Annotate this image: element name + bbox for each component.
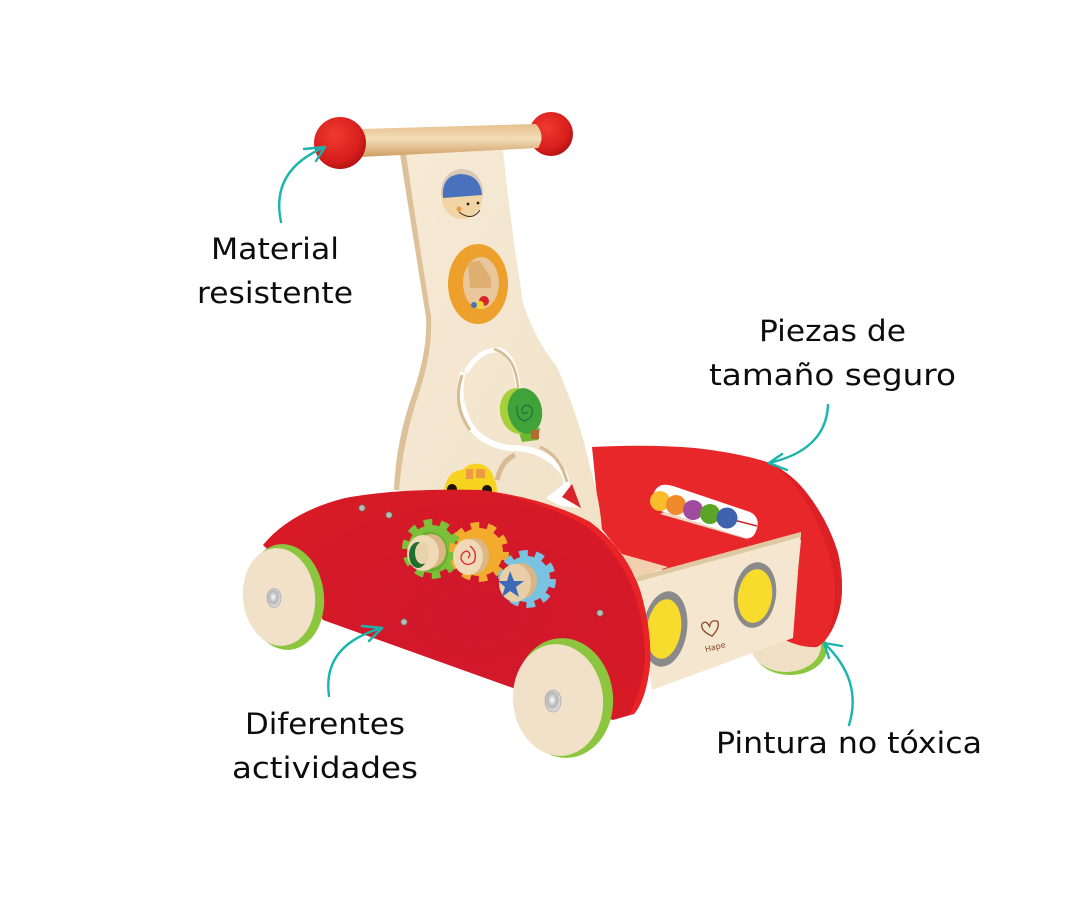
bead wire — [660, 501, 757, 526]
walker toy illustration — [238, 112, 842, 763]
label: piezas de tamaño seguro: tamaño seguro — [709, 358, 956, 392]
label: diferentes actividades — [232, 707, 418, 785]
orange ring window — [448, 244, 508, 324]
left red knob — [314, 117, 366, 169]
bead track loop — [458, 349, 568, 490]
plank yellow circles — [646, 562, 776, 667]
brand logo — [699, 619, 727, 654]
front red side panel — [263, 490, 650, 720]
front plank — [636, 532, 801, 690]
arrow: diferentes actividades — [328, 626, 382, 696]
green spiral piece — [496, 385, 546, 442]
cart floor — [622, 554, 668, 578]
front left wheel — [238, 540, 329, 654]
toy car — [444, 464, 497, 495]
screws — [359, 505, 603, 625]
label: diferentes actividades: Diferentes — [245, 707, 405, 741]
beads — [650, 491, 738, 528]
rear red side panel — [592, 446, 842, 647]
label: piezas de tamaño seguro — [709, 314, 956, 392]
label: material resistente: Material — [211, 232, 339, 266]
arrow: pintura no tóxica — [824, 643, 853, 725]
face toy — [441, 169, 483, 219]
blue gear — [498, 555, 551, 603]
activity board — [394, 150, 602, 530]
bead slot — [650, 485, 758, 540]
handle bar — [314, 112, 573, 169]
sign toy — [546, 482, 581, 508]
label: material resistente — [197, 232, 353, 310]
label: piezas de tamaño seguro: Piezas de — [759, 314, 906, 348]
back wheel — [751, 620, 827, 675]
arrow: piezas de tamaño seguro — [769, 405, 828, 470]
label: material resistente: resistente — [197, 276, 353, 310]
green gear — [407, 524, 457, 574]
arrow: material resistente — [279, 147, 325, 222]
gears — [407, 524, 551, 603]
front right wheel — [507, 633, 619, 763]
label: diferentes actividades: actividades — [232, 751, 418, 785]
brand logo: Hape — [704, 640, 727, 654]
right red knob — [529, 112, 573, 156]
label: pintura no tóxica: Pintura no tóxica — [716, 726, 982, 760]
orange gear — [453, 527, 504, 577]
